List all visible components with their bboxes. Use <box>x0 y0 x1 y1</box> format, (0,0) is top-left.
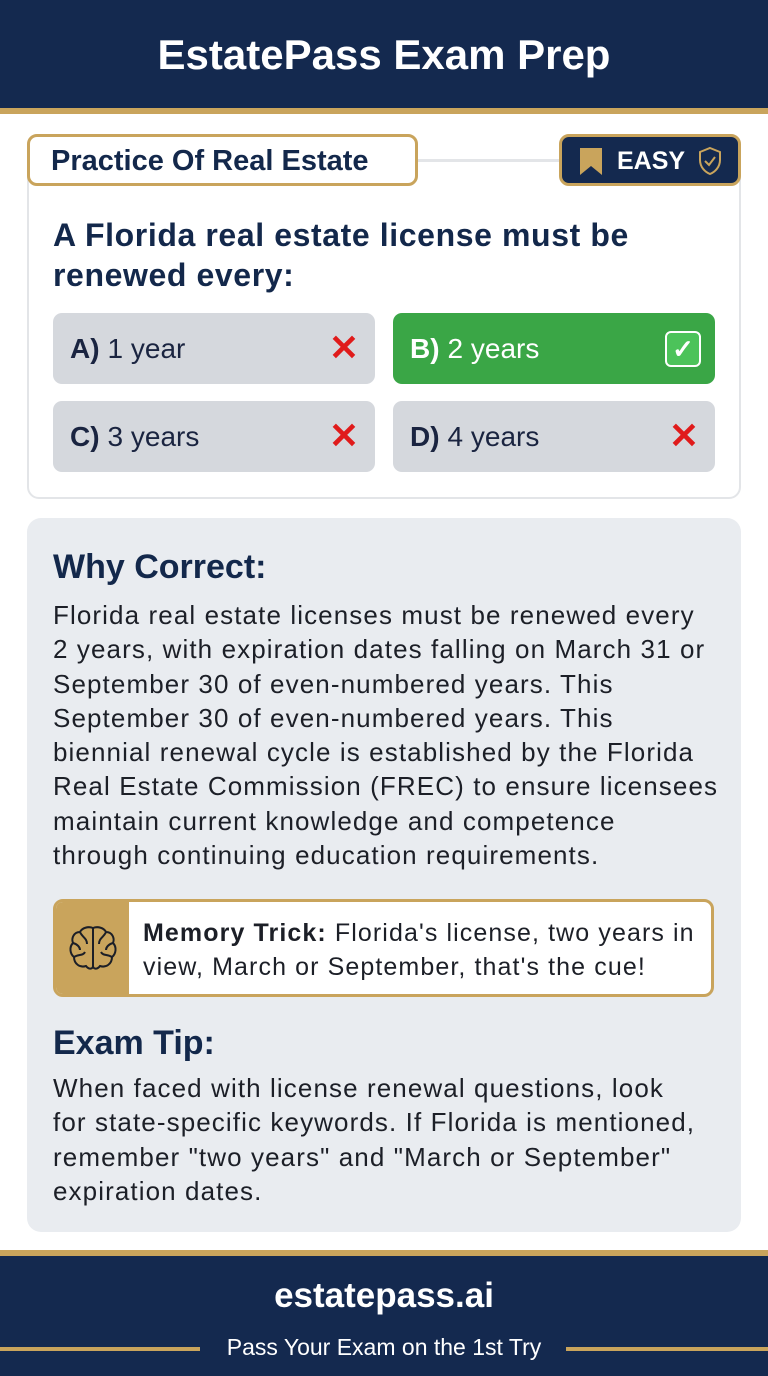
exam tip text: for state-specific keywords. If Florida is mentioned, <box>53 1107 695 1137</box>
difficulty badge: EASY <box>617 147 685 175</box>
icon: shield check <box>699 146 721 175</box>
option A <box>53 313 375 384</box>
explanation text: Florida real estate licenses must be renewed every <box>53 600 695 630</box>
option C: C) <box>70 420 100 452</box>
footer url: estatepass.ai <box>274 1276 494 1315</box>
option B correct: B) <box>410 332 440 364</box>
option B correct: ✓ <box>672 334 694 364</box>
tagline: Pass Your Exam on the 1st Try <box>227 1334 541 1360</box>
question: renewed every: <box>53 257 294 293</box>
title: EstatePass Exam Prep <box>158 31 610 78</box>
memory trick callout: view, March or September, that's the cue! <box>143 953 646 981</box>
option C <box>53 401 375 472</box>
exam tip text: expiration dates. <box>53 1176 262 1206</box>
option D: D) <box>410 420 440 452</box>
header <box>0 0 768 114</box>
memory trick callout: Memory Trick: Florida's license, two years in <box>143 919 695 947</box>
option A: A) <box>70 332 100 364</box>
option A: ✕ <box>329 327 359 368</box>
explanation text: biennial renewal cycle is established by the Florida <box>53 737 694 767</box>
question: A Florida real estate license must be <box>53 217 629 253</box>
explanation text: through continuing education requirements. <box>53 840 599 870</box>
difficulty badge <box>559 134 741 186</box>
option C: ✕ <box>329 415 359 456</box>
question <box>53 217 629 293</box>
category pill <box>27 134 418 186</box>
option D <box>393 401 715 472</box>
exam tip text: remember "two years" and "March or September" <box>53 1142 671 1172</box>
option B correct <box>393 313 715 384</box>
explanation panel <box>27 518 741 1232</box>
heading: exam tip: Exam Tip: <box>53 1024 215 1062</box>
option B correct: 2 years <box>448 332 539 364</box>
option D: ✕ <box>669 415 699 456</box>
explanation text: Real Estate Commission (FREC) to ensure licensees <box>53 771 718 801</box>
icon: bookmark <box>580 148 602 175</box>
icon: brain <box>56 902 129 994</box>
option A: 1 year <box>108 332 185 364</box>
option D: 4 years <box>448 420 539 452</box>
explanation text: 2 years, with expiration dates falling on March 31 or <box>53 634 705 664</box>
question card <box>27 160 741 499</box>
exam tip text <box>53 1073 695 1206</box>
exam tip text: When faced with license renewal questions, look <box>53 1073 664 1103</box>
heading: why correct: Why Correct: <box>53 548 266 586</box>
memory trick callout <box>53 899 714 997</box>
explanation text: maintain current knowledge and competence <box>53 806 616 836</box>
explanation text: September 30 of even-numbered years. This <box>53 703 614 733</box>
option C: 3 years <box>108 420 199 452</box>
footer <box>0 1250 768 1376</box>
explanation text <box>53 600 718 870</box>
category pill: Practice Of Real Estate <box>51 145 369 177</box>
explanation text: September 30 of even-numbered years. This <box>53 669 614 699</box>
